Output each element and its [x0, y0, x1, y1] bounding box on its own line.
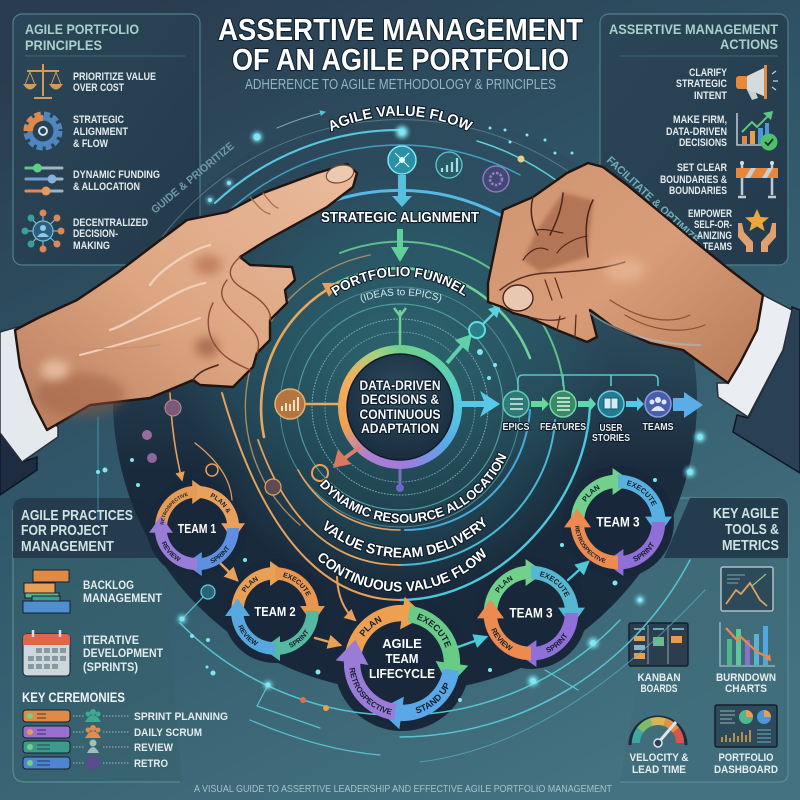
user stories node	[598, 391, 624, 417]
text: clarify strategic intent: INTENT	[694, 90, 727, 102]
flow labels: EPICS	[502, 421, 530, 433]
team 2 cycle: PLAN	[242, 576, 258, 592]
icon: sliders	[26, 164, 62, 196]
text: empower self-organizing teams: ANIZING	[697, 230, 732, 242]
subtitle: ADHERENCE TO AGILE METHODOLOGY & PRINCIPLES	[245, 76, 556, 93]
text: decentralized decision-making: DECENTRALIZED	[73, 217, 148, 229]
hub text: CONTINUOUS	[360, 407, 440, 422]
team 3 cycle, upper: PLAN	[582, 484, 600, 502]
agile team lifecycle: PLAN	[359, 616, 382, 636]
team 3 cycle, upper: EXECUTE	[626, 480, 657, 506]
panel: assertive management actions	[600, 14, 788, 265]
ceremony row: review: REVIEW	[134, 742, 174, 754]
text: backlog management: MANAGEMENT	[83, 591, 163, 605]
icon: line chart panel	[721, 567, 773, 611]
label: kanban boards	[638, 672, 681, 695]
panel heading: TOOLS &	[725, 521, 779, 538]
hub text: ADAPTATION	[361, 421, 439, 436]
flow connector arrows	[531, 397, 644, 411]
arc label: ideas to epics: (IDEAS to EPICS)	[360, 288, 442, 303]
footer tagline: A VISUAL GUIDE TO ASSERTIVE LEADERSHIP AND EFFECTIVE AGILE PORTFOLIO MANAGEMENT	[194, 783, 612, 795]
team 3 cycle, upper: TEAM 3	[596, 515, 640, 530]
team 3 cycle, upper	[564, 468, 672, 576]
text: set clear boundaries	[660, 162, 727, 197]
panel heading: AGILE PORTFOLIO	[25, 21, 139, 37]
ceremony row: daily scrum: DAILY SCRUM	[134, 727, 202, 739]
hub text: DECISIONS &	[361, 392, 439, 407]
hub core	[347, 354, 453, 460]
centre axis icons	[388, 146, 509, 262]
text: firm decisions	[666, 114, 727, 149]
hub right arrow	[458, 391, 500, 417]
text: clarify strategic intent: STRATEGIC	[676, 78, 727, 90]
text: prioritize value: PRIORITIZE VALUE	[73, 71, 156, 83]
flow labels: USER	[600, 422, 623, 434]
teams node	[645, 391, 671, 417]
output arrow	[673, 392, 703, 418]
team 2 cycle: TEAM 2	[254, 604, 296, 619]
text: decentralized decision-making: MAKING	[73, 240, 110, 252]
label: velocity and lead time	[630, 752, 689, 776]
panel header band	[13, 498, 157, 558]
team 3 cycle, lower: TEAM 3	[509, 606, 553, 621]
text: empower self-organizing teams: TEAMS	[703, 241, 732, 253]
heading: agile practices for project management: MANAGEMENT	[21, 538, 114, 555]
agile team lifecycle: TEAM	[386, 651, 418, 666]
team 1 cycle: PLAN &	[210, 493, 230, 514]
icon: balance scales	[25, 64, 61, 98]
panel: agile portfolio principles	[13, 14, 200, 265]
ceremony row: retro: RETRO	[134, 758, 168, 770]
right hand	[488, 163, 763, 383]
central hub	[275, 305, 501, 492]
panel header band	[664, 498, 788, 558]
text: backlog management	[83, 578, 163, 605]
right jacket sleeve	[733, 307, 800, 473]
label: strategic alignment: STRATEGIC ALIGNMENT	[321, 210, 479, 226]
hub north-east arrow	[447, 305, 501, 363]
hub bottom spoke	[396, 469, 404, 492]
icon: portfolio dashboard	[715, 705, 777, 747]
left shirt cuff	[0, 327, 58, 462]
panel heading: METRICS	[722, 537, 779, 554]
hub gradient ring	[338, 345, 462, 469]
agile team lifecycle	[336, 596, 468, 730]
curved label: facilitate and optimize: FACILITATE & OPTIMIZE	[604, 154, 701, 246]
heading: key ceremonies: KEY CEREMONIES	[22, 689, 125, 705]
team 1 cycle	[149, 480, 245, 576]
panel heading	[609, 21, 778, 52]
label: burndown charts	[716, 672, 776, 695]
title	[218, 12, 583, 77]
label: portfolio dashboard: DASHBOARD	[714, 764, 778, 776]
team 3 cycle, lower: REVIEW	[491, 628, 513, 650]
panel heading: KEY AGILE	[713, 505, 779, 522]
agile team lifecycle: AGILE	[382, 636, 422, 651]
text: dynamic funding: & ALLOCATION	[73, 181, 140, 193]
team 3 cycle, lower	[477, 559, 585, 667]
features node	[550, 391, 576, 417]
team 3 cycle, lower: PLAN	[494, 576, 513, 593]
icon: sprint calendar	[23, 630, 70, 676]
epics node	[503, 391, 529, 417]
panel heading: ACTIONS	[720, 36, 778, 52]
flow arcs	[98, 112, 705, 762]
flow labels	[502, 421, 674, 444]
text: strategic alignment	[73, 114, 128, 150]
curved label: guide and prioritize: GUIDE & PRIORITIZE	[149, 140, 237, 216]
icon: growth chart	[436, 152, 462, 178]
icon: decentralized network	[22, 210, 64, 252]
panel heading	[25, 21, 139, 53]
ceremony row: daily scrum	[23, 725, 202, 739]
icon: burndown chart	[720, 622, 775, 666]
label: burndown charts: CHARTS	[725, 683, 767, 695]
icon: kanban board	[629, 623, 688, 666]
arc label: value stream delivery: VALUE STREAM DELIVERY	[323, 515, 487, 559]
text: clarify strategic intent	[676, 67, 728, 102]
team 3 cycle, upper: RETROSPECTIVE	[575, 526, 606, 563]
text: firm decisions: MAKE FIRM,	[673, 114, 727, 126]
team 2 cycle: REVIEW	[238, 624, 258, 646]
flow labels: FEATURES	[540, 421, 586, 433]
text: clarify strategic intent: CLARIFY	[689, 67, 728, 79]
right thumb nail	[503, 285, 533, 311]
text: set clear boundaries: BOUNDARIES &	[660, 174, 727, 186]
team 2 cycle: SPRINT	[289, 629, 308, 648]
team 1 cycle: RETROSPECTIVE	[160, 492, 188, 524]
text: decentralized decision-making	[73, 217, 148, 252]
text: empower self-organizing teams: EMPOWER	[688, 208, 732, 220]
text: empower self-organizing teams: SELF-OR-	[694, 219, 732, 231]
text: strategic alignment: ALIGNMENT	[73, 126, 128, 138]
label: kanban boards: KANBAN	[638, 672, 681, 684]
right shirt cuff	[717, 295, 792, 417]
agile team lifecycle: RETROSPECTIVE	[350, 668, 392, 715]
agile team lifecycle: EXECUTE	[416, 613, 452, 648]
arc label: agile value flow: AGILE VALUE FLOW	[329, 104, 474, 132]
arc label: dynamic resource allocation: DYNAMIC RESOURCE ALLOCATION	[318, 452, 508, 524]
team 3 cycle, lower: EXECUTE	[540, 571, 570, 598]
ceremony row: sprint planning	[23, 709, 228, 723]
text: decentralized decision-making: DECISION-	[73, 228, 118, 240]
text: iterative development	[83, 633, 164, 674]
text: backlog management: BACKLOG	[83, 578, 134, 592]
label: portfolio dashboard	[714, 752, 778, 776]
label: portfolio dashboard: PORTFOLIO	[718, 752, 774, 764]
right hand shading	[500, 193, 705, 345]
team 2 cycle	[225, 561, 325, 661]
hub text: DATA-DRIVEN	[360, 378, 440, 393]
team 1 cycle: SPRINT	[210, 545, 229, 563]
text: firm decisions: DATA-DRIVEN	[666, 126, 727, 138]
title: OF AN AGILE PORTFOLIO	[232, 42, 569, 77]
text: firm decisions: DECISIONS	[679, 137, 727, 149]
label: velocity and lead time: LEAD TIME	[632, 764, 686, 776]
text: dynamic funding	[73, 169, 160, 193]
team 1 cycle: TEAM 1	[178, 522, 216, 536]
flow labels: STORIES	[592, 432, 630, 444]
right pinching hand with cuff	[488, 163, 800, 473]
team 3 cycle, upper: SPRINT	[633, 542, 654, 562]
arrow down to portfolio funnel	[391, 229, 409, 262]
arc label: continuous value flow: CONTINUOUS VALUE FLOW	[317, 546, 487, 593]
text: strategic alignment: & FLOW	[73, 138, 108, 150]
icon: backlog blocks	[23, 570, 70, 613]
text: iterative development: ITERATIVE	[83, 633, 139, 647]
icon: gear	[483, 166, 509, 192]
label: kanban boards: BOARDS	[640, 683, 678, 695]
arc label: portfolio funnel: PORTFOLIO FUNNEL	[330, 266, 466, 298]
label: burndown charts: BURNDOWN	[716, 672, 776, 684]
left finger nail	[324, 162, 356, 186]
text: prioritize value: OVER COST	[73, 82, 124, 94]
hub top spoke	[394, 308, 406, 345]
flow labels: TEAMS	[642, 421, 674, 433]
text: iterative development: (SPRINTS)	[83, 660, 138, 674]
process flow: epics to teams	[502, 375, 703, 444]
panel heading: PRINCIPLES	[25, 37, 102, 53]
text: dynamic funding: DYNAMIC FUNDING	[73, 169, 160, 181]
team 1 cycle: REVIEW	[162, 541, 181, 562]
panel heading: ASSERTIVE MANAGEMENT	[609, 21, 778, 37]
text: iterative development: DEVELOPMENT	[83, 646, 164, 660]
icon: rising chart with check	[737, 111, 778, 150]
panel: key agile tools and metrics	[620, 498, 788, 782]
left hand shading	[30, 193, 278, 417]
panel heading	[713, 505, 779, 554]
hub text	[360, 378, 440, 436]
ceremony row: sprint planning: SPRINT PLANNING	[134, 711, 228, 723]
hub south-west arrow	[333, 447, 360, 468]
text: empower self-organizing teams	[688, 208, 732, 253]
feedback bracket	[518, 375, 658, 392]
panel: agile practices for project management	[13, 498, 228, 782]
label: velocity and lead time: VELOCITY &	[630, 752, 689, 764]
arrow down to strategic alignment	[392, 175, 412, 207]
text: set clear boundaries: SET CLEAR	[677, 162, 727, 174]
text: set clear boundaries: BOUNDARIES	[669, 185, 727, 197]
ceremony row: review	[23, 740, 174, 754]
agile team lifecycle: LIFECYCLE	[369, 666, 435, 681]
icon: megaphone	[736, 65, 778, 100]
text: prioritize value	[73, 71, 156, 94]
icon: road barrier	[736, 161, 778, 197]
heading: agile practices for project management: FOR PROJECT	[21, 522, 108, 539]
left jacket sleeve	[0, 430, 37, 495]
icon: network hub	[388, 146, 416, 174]
left hand	[15, 164, 357, 430]
icon: gear target	[26, 114, 60, 148]
glowing dots	[96, 126, 705, 711]
agile team lifecycle: STAND UP	[416, 682, 448, 714]
hub left node	[275, 389, 340, 419]
heading: agile practices for project management	[21, 507, 133, 555]
team 2 cycle: EXECUTE	[283, 572, 311, 596]
heading: agile practices for project management: AGILE PRACTICES	[21, 507, 133, 524]
dark central disc	[113, 108, 697, 731]
icon: star in open hands	[738, 209, 776, 252]
text: strategic alignment: STRATEGIC	[73, 114, 124, 126]
team 3 cycle, lower: SPRINT	[546, 632, 567, 652]
left pointing hand with cuff	[0, 162, 357, 495]
ceremony row: retro	[23, 756, 168, 770]
icon: velocity gauge	[630, 717, 686, 747]
title: ASSERTIVE MANAGEMENT	[218, 12, 583, 47]
